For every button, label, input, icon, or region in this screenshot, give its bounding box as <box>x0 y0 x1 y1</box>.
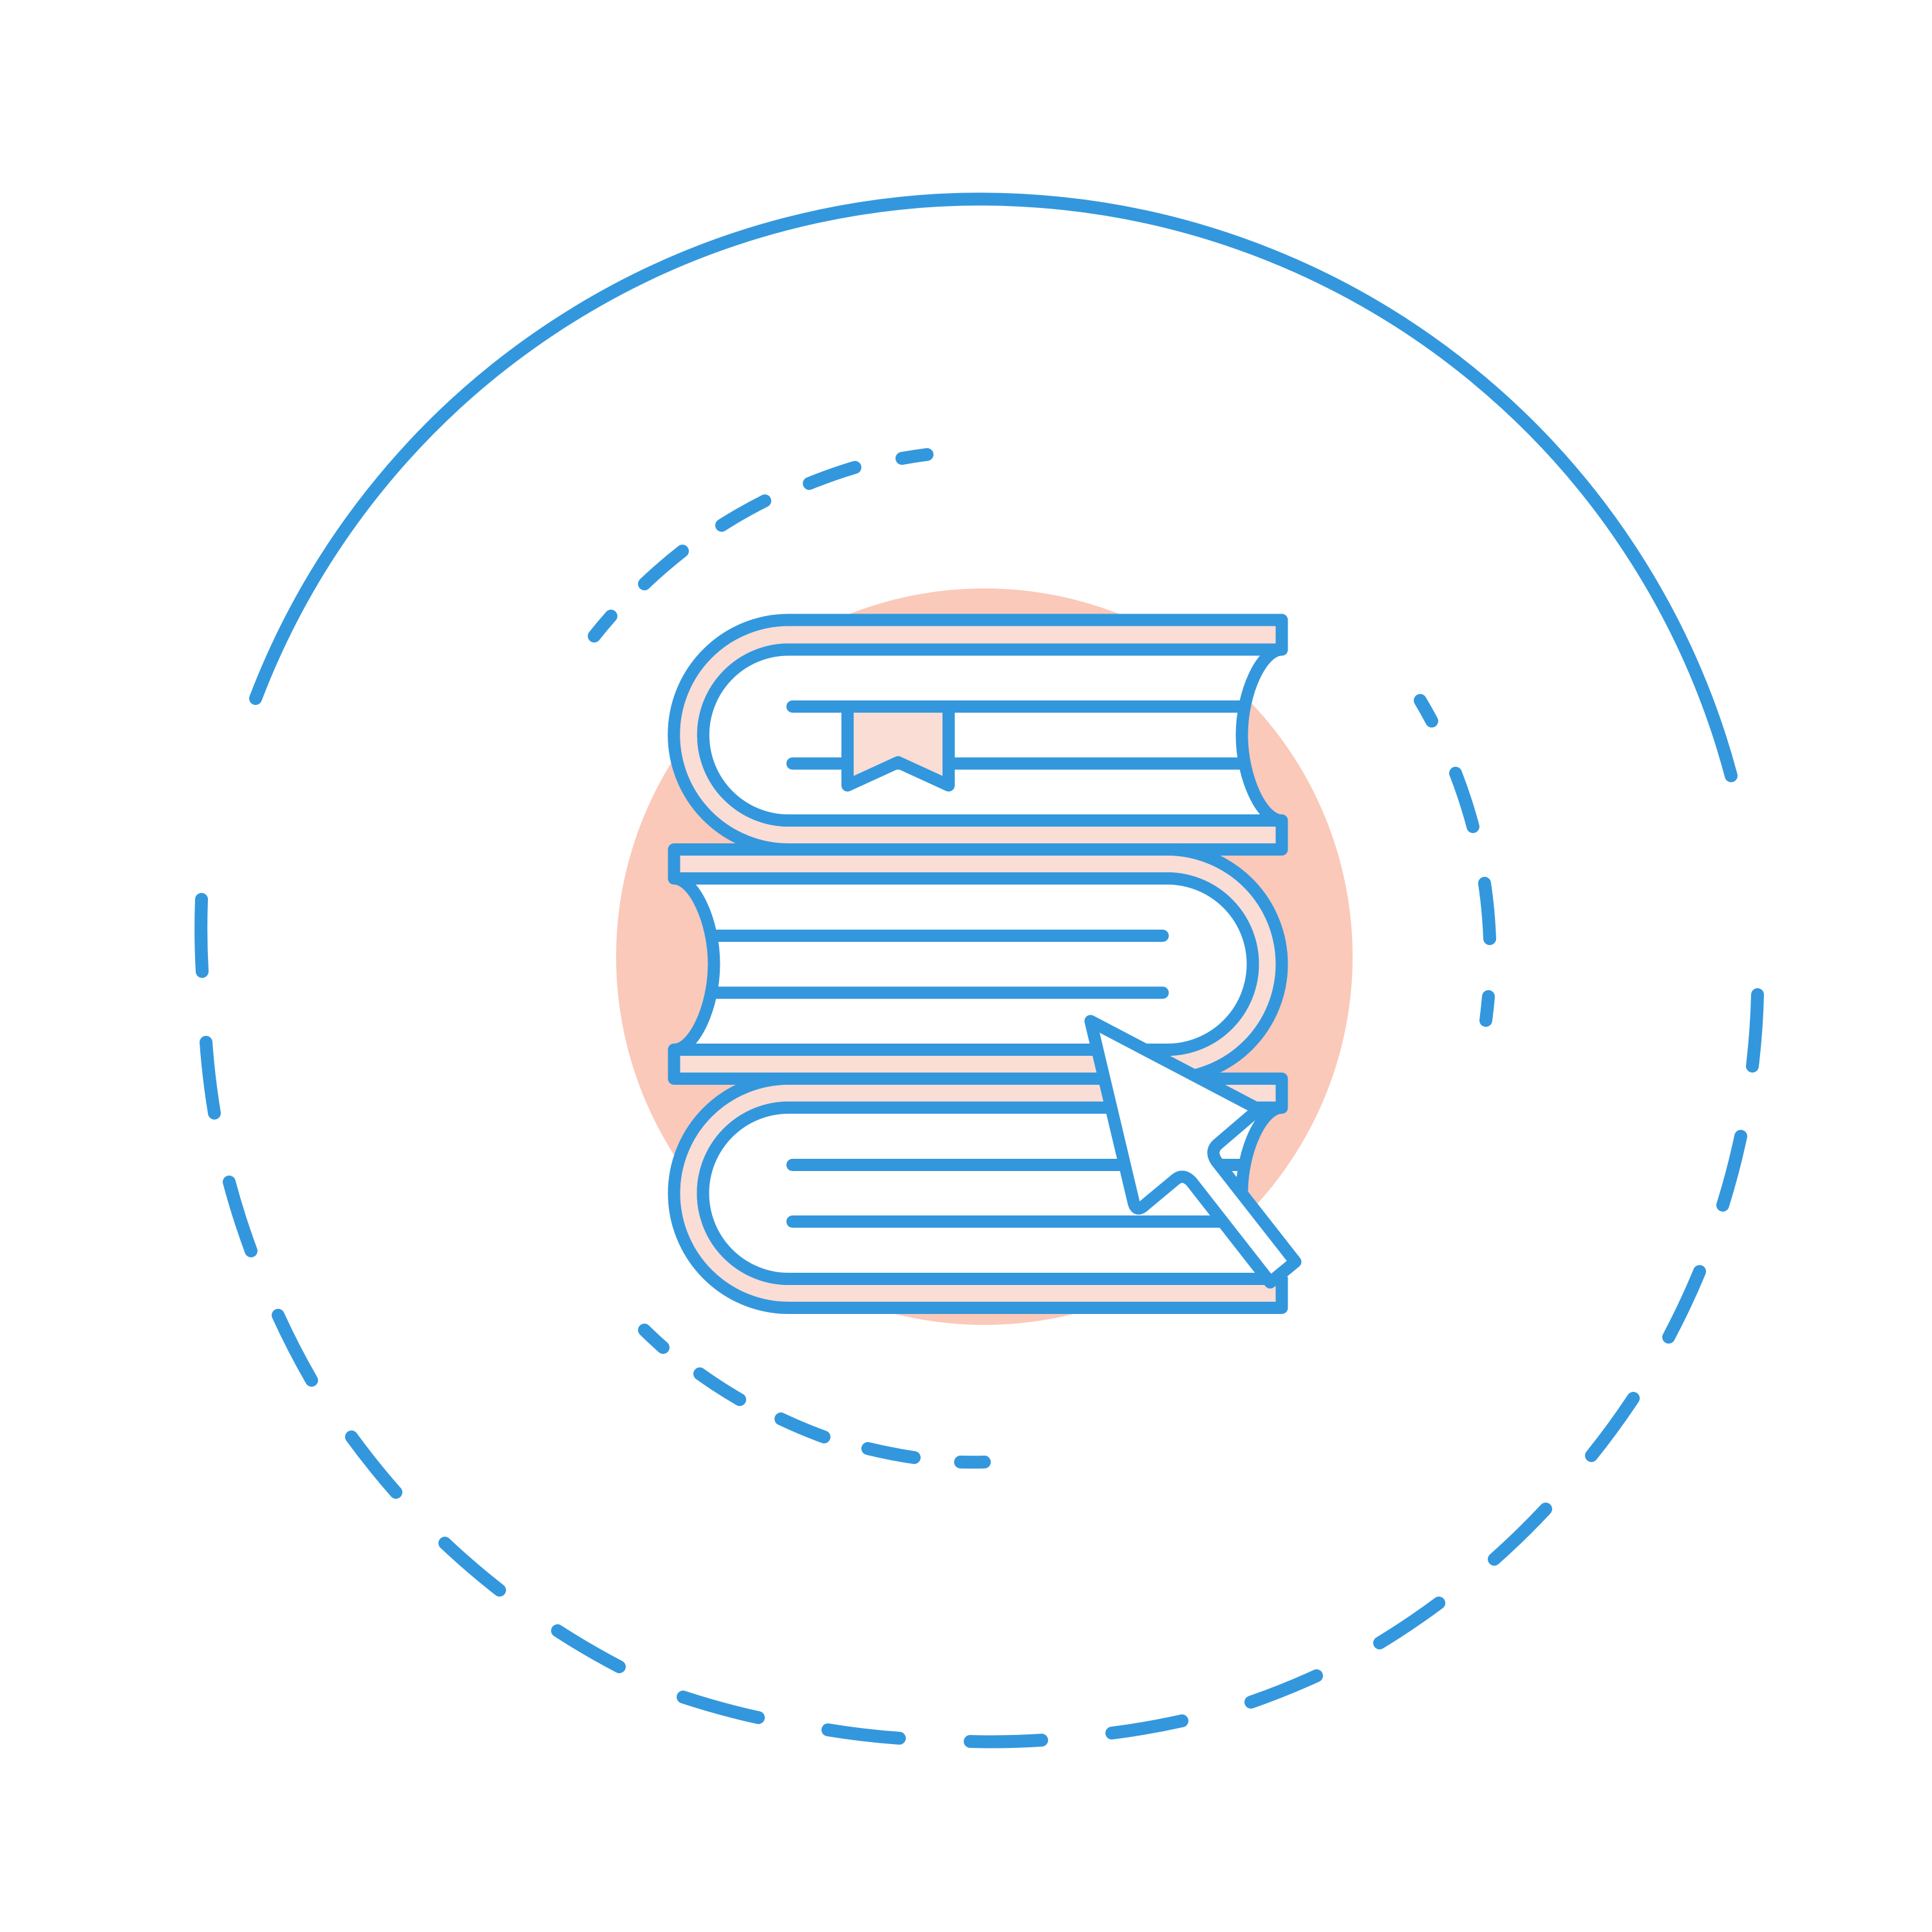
book: bottom <box>674 1079 1282 1308</box>
outer dashed ring <box>201 899 1758 1741</box>
inner dashed ring <box>594 455 1490 1462</box>
background circle <box>616 588 1353 1325</box>
icon: cursor arrow <box>1091 1021 1295 1282</box>
bookmark <box>847 707 949 785</box>
bottom book page lines <box>792 1165 1243 1222</box>
top book page lines <box>792 707 1243 764</box>
book: top <box>674 620 1282 850</box>
top book cover <box>674 620 1282 850</box>
book: middle <box>674 850 1282 1079</box>
bottom book cover <box>674 1079 1282 1308</box>
middle book pages <box>674 878 1253 1049</box>
bottom book pages <box>703 1107 1282 1279</box>
top book pages <box>703 650 1282 820</box>
middle book cover <box>674 850 1282 1079</box>
middle book page lines <box>712 936 1163 993</box>
outer solid arc <box>256 199 1731 776</box>
